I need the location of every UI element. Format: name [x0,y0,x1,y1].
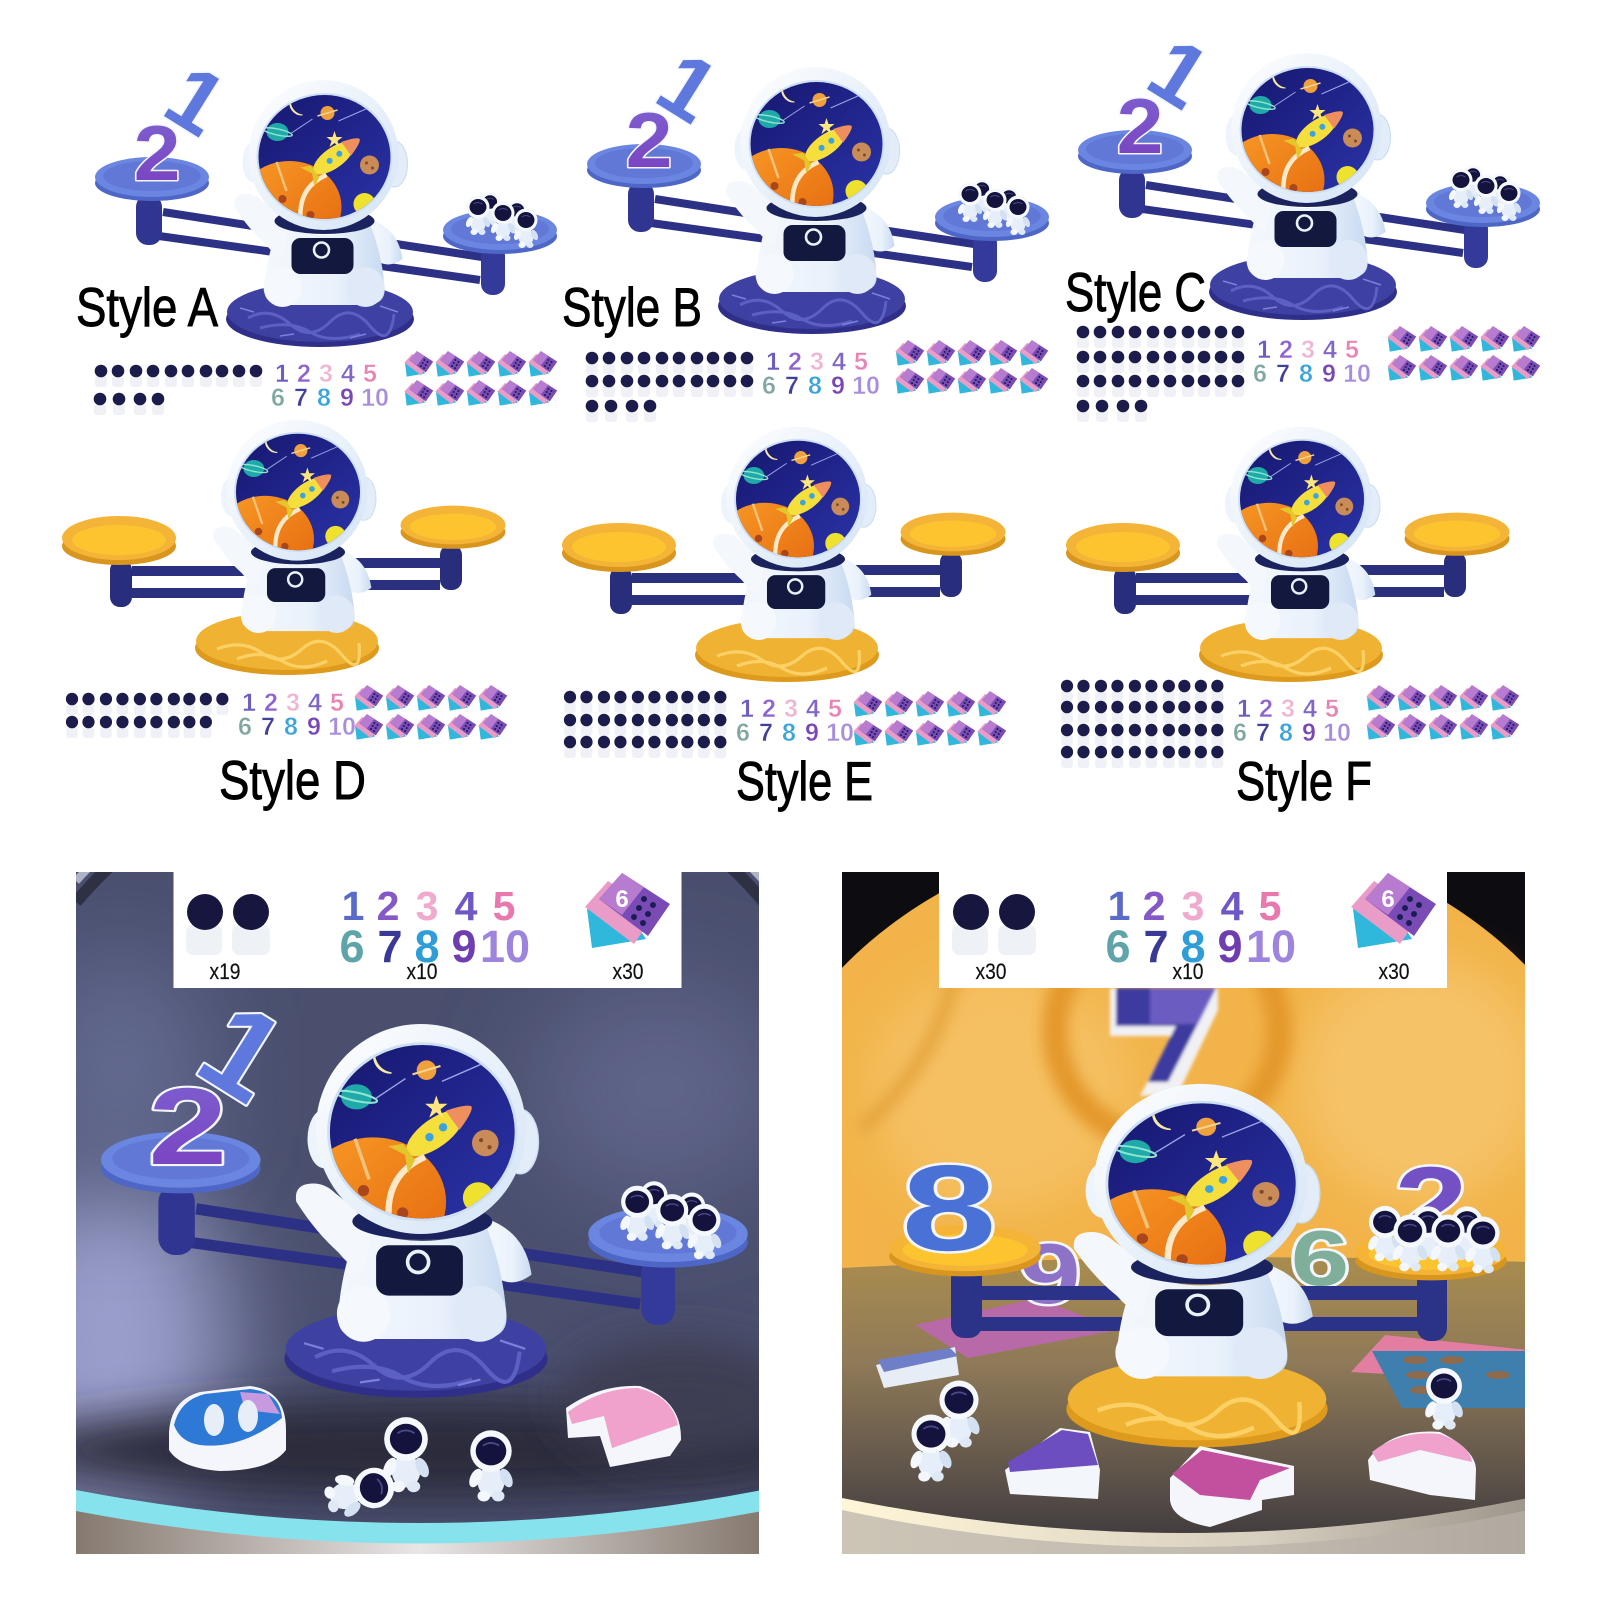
main astronaut [1074,1084,1320,1379]
number row: 10 [1246,921,1296,972]
Style C toy [1078,18,1540,320]
quantity labels: x10 [1172,959,1204,984]
Style E label: Style E [736,750,873,812]
icon: counters [186,894,270,955]
card stack [585,873,670,948]
Style D toy [62,420,505,675]
icon: counters [952,894,1036,955]
Style B number tiles: 5 [854,348,868,376]
Style B toy: 1 [641,32,735,142]
Style F number tiles: 10 [1323,719,1351,747]
Style B number tiles: 10 [852,372,880,400]
Style D cards [354,685,507,740]
number row: 4 [1221,883,1244,929]
mini astronaut on board [1423,1368,1465,1430]
Style A number tiles: 3 [319,360,333,388]
number row: 8 [1180,921,1206,972]
number row: 1 [342,883,364,929]
Style C number tiles: 3 [1301,336,1315,364]
Style D number tiles: 5 [330,689,344,717]
Style E number tiles: 10 [826,719,854,747]
Style E number tiles: 3 [784,695,798,723]
Style B label: Style B [562,276,702,338]
Style F number tiles: 3 [1281,695,1295,723]
Style C number tiles: 6 [1253,360,1267,388]
Style A number tiles: 10 [361,384,389,412]
tile: three [566,1386,681,1467]
mini astronaut [383,1417,429,1492]
Style A number tiles: 9 [340,384,354,412]
quantity labels [210,963,643,980]
Style C label: Style C [1065,261,1206,323]
mini astronaut [939,1380,980,1448]
Style B cards [895,340,1048,394]
number row: 7 [377,921,403,972]
mini astronaut [467,1430,515,1501]
Style C number tiles: 7 [1276,360,1290,388]
Style A counters [94,365,262,415]
background numerals 9 and 6 [1020,1228,1349,1306]
Style F label: Style F [1236,750,1372,812]
Style E number tiles: 2 [762,695,776,723]
left pan with 8 [889,1162,1041,1276]
quantity labels: x30 [976,959,1006,984]
parts strip [174,872,682,988]
Style B toy [587,32,1049,334]
balance beam [951,1276,1447,1341]
Style A number tiles: 2 [297,360,311,388]
background numerals 9 and 6: 6 [1291,1214,1349,1302]
Style A number tiles: 4 [341,360,355,388]
blurred seven tile [1110,988,1218,1096]
Style C number tiles: 4 [1323,336,1337,364]
Style D number tiles [238,689,356,741]
Style F number tiles: 2 [1259,695,1273,723]
number row: 2 [377,883,399,929]
base [1066,1358,1328,1447]
Style E number tiles: 5 [828,695,842,723]
Style C number tiles: 10 [1343,360,1371,388]
Style C product [1065,18,1540,422]
card stack: 6 [1381,886,1395,913]
Style F number tiles: 9 [1302,719,1316,747]
Style A cards [404,351,557,406]
Style B product [562,32,1049,422]
Style F counters [1061,680,1223,768]
number row: 9 [1217,921,1243,972]
Style D label: Style D [219,749,366,811]
Style F number tiles [1233,695,1351,747]
Style D number tiles: 9 [307,713,321,741]
Style F number tiles: 8 [1279,719,1293,747]
Style D number tiles: 4 [308,689,322,717]
Style D number tiles: 2 [264,689,278,717]
Style A toy: 1 [149,45,243,155]
tile: three [1368,1432,1476,1500]
tile: zero [169,1386,286,1471]
left pan with 8: 8 [902,1141,996,1276]
Style C number tiles: 8 [1299,360,1313,388]
Style B number tiles: 9 [831,372,845,400]
Style B number tiles: 7 [785,372,799,400]
Style B number tiles: 2 [788,348,802,376]
Style F number tiles: 4 [1303,695,1317,723]
Style A number tiles: 6 [271,384,285,412]
number row: 10 [480,921,530,972]
Style A product [76,45,557,415]
Style D number tiles: 8 [284,713,298,741]
number row: 8 [414,921,440,972]
Style C number tiles: 1 [1257,336,1271,364]
number row: 9 [451,921,477,972]
Style C number tiles [1253,336,1371,388]
card stack: 6 [615,886,629,913]
Style B toy: 2 [626,98,672,184]
Style E counters [564,691,726,758]
Style E product [562,427,1006,812]
tile: one [876,1347,959,1388]
Style B number tiles: 1 [766,348,780,376]
quantity labels: x19 [210,959,240,984]
Style E cards [853,691,1006,746]
Style C toy: 1 [1132,18,1226,128]
number row [1107,892,1294,962]
number row: 3 [1182,883,1204,929]
quantity labels [976,959,1410,984]
Style C number tiles: 9 [1322,360,1336,388]
Style D number tiles: 7 [261,713,275,741]
right pan with 2 and astronauts: 2 [1394,1145,1468,1263]
Style A number tiles [271,360,389,412]
Style D number tiles: 6 [238,713,252,741]
Style E number tiles [736,695,854,747]
Style B number tiles: 3 [810,348,824,376]
Style C number tiles: 5 [1345,336,1359,364]
number row: 5 [493,883,515,929]
Style F toy [1066,427,1509,682]
Style D number tiles: 1 [242,689,256,717]
tile: four [1005,1428,1100,1499]
right pan with 2 and astronauts [1355,1164,1507,1280]
quantity labels: x10 [406,959,438,984]
Style D number tiles: 3 [286,689,300,717]
Style D counters [66,693,228,738]
tile: five [1170,1446,1294,1527]
Style C toy: 2 [1117,84,1163,170]
Style D product [62,420,507,811]
number row [341,892,528,962]
main blue toy: 2 [148,1065,227,1187]
card stack [1351,873,1436,948]
number row: 6 [339,921,365,972]
Style B number tiles: 6 [762,372,776,400]
Style E number tiles: 1 [740,695,754,723]
scene background [76,872,759,1554]
quantity labels: x30 [1378,959,1410,984]
panel: blue scene photo [76,872,759,1554]
Style F number tiles: 6 [1233,719,1247,747]
Style A number tiles: 1 [275,360,289,388]
panel: yellow scene photo [842,872,1525,1554]
Style B number tiles: 8 [808,372,822,400]
scene background [842,872,1525,1554]
main blue toy: 1 [177,976,308,1129]
Style B number tiles: 4 [832,348,846,376]
number row: 7 [1143,921,1169,972]
Style F number tiles: 1 [1237,695,1251,723]
Style E number tiles: 9 [805,719,819,747]
Style B counters [586,352,753,422]
Style E number tiles: 6 [736,719,750,747]
Style A toy: 2 [134,111,180,197]
Style A number tiles: 8 [317,384,331,412]
Style E toy [562,427,1005,682]
Style A label: Style A [76,276,218,338]
Style B number tiles [762,348,880,400]
Style F product [1061,427,1519,812]
Style E number tiles: 4 [806,695,820,723]
quantity labels: x30 [612,959,644,984]
Style E number tiles: 8 [782,719,796,747]
Style A number tiles: 7 [294,384,308,412]
Style F number tiles: 5 [1325,695,1339,723]
number row: 5 [1259,883,1281,929]
game cards on table [915,1298,1528,1408]
number row: 2 [1143,883,1165,929]
parts strip [939,872,1447,988]
Style C counters [1077,326,1244,422]
Style C number tiles: 2 [1279,336,1293,364]
Style D number tiles: 10 [328,713,356,741]
Style F cards [1366,685,1519,740]
number row: 3 [416,883,438,929]
Style F number tiles: 7 [1256,719,1270,747]
number row: 6 [1105,921,1131,972]
number row: 1 [1108,883,1130,929]
main blue toy [101,976,748,1398]
lying mini astronaut [324,1468,394,1517]
number row: 4 [455,883,478,929]
background numerals 9 and 6: 9 [1019,1226,1081,1321]
Style A toy [95,45,557,347]
Style A number tiles: 5 [363,360,377,388]
mini astronaut [910,1414,952,1482]
Style E number tiles: 7 [759,719,773,747]
Style C cards [1387,326,1540,381]
